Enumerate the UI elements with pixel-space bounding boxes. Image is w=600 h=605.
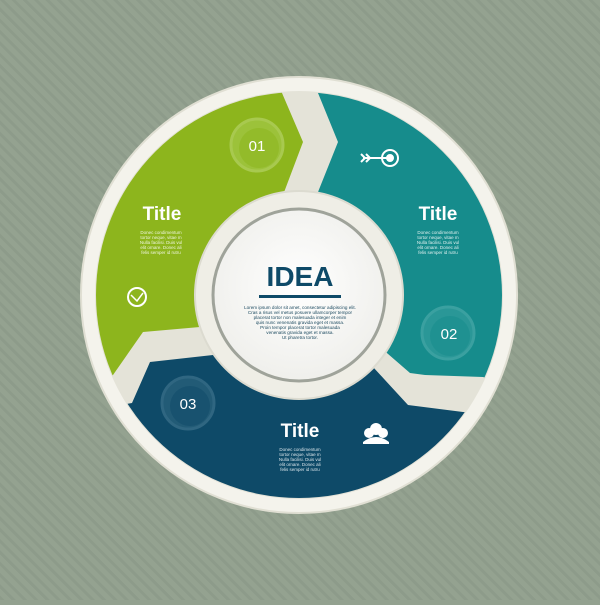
- center text: Ut pharetra tortor.: [282, 335, 318, 340]
- title 1: [140, 204, 182, 255]
- panel: teal segment 02: [318, 92, 502, 378]
- badge 02: 02: [441, 326, 457, 343]
- title 3: Donec condimentum: [279, 447, 321, 452]
- title 3: felis semper id rutru: [280, 467, 320, 472]
- panel: green segment 01: [96, 92, 303, 376]
- title 3: [279, 421, 321, 472]
- outer ring: [81, 77, 517, 513]
- title 3: elit ornare. Donec ali: [279, 462, 321, 467]
- title 1: elit ornare. Donec ali: [140, 245, 182, 250]
- badge 03: [162, 377, 214, 429]
- icon: clock: [128, 288, 146, 306]
- center text: Proin tempor placerat tortor malesuada: [260, 325, 340, 330]
- title 2: tortor neque, vitae m: [417, 235, 459, 240]
- icon: cloud hat: [363, 423, 389, 444]
- title 2: Donec condimentum: [417, 230, 459, 235]
- title 1: Title: [143, 204, 181, 225]
- center circle: [195, 191, 403, 399]
- panel: blue segment 03: [128, 355, 465, 498]
- title 2: felis semper id rutru: [418, 250, 458, 255]
- title 2: Nulla facilisi. Duis vul: [417, 240, 459, 245]
- title 2: Title: [419, 204, 457, 225]
- center text: Cras a risus vel metus posuere ullamcorper tempor: [248, 310, 353, 315]
- center text: quis nunc venenatis gravida eget et massa.: [256, 320, 344, 325]
- center text: Lorem ipsum dolor sit amet, consectetur adipiscing elit.: [244, 305, 356, 310]
- center text: venenatis gravida eget et massa.: [266, 330, 334, 335]
- title 1: Donec condimentum: [140, 230, 182, 235]
- title 2: elit ornare. Donec ali: [417, 245, 459, 250]
- heading: IDEA: IDEA: [267, 261, 333, 292]
- badge 01: [231, 119, 283, 171]
- badge 01: 01: [249, 138, 265, 155]
- badge 02: [422, 307, 474, 359]
- title 1: felis semper id rutru: [141, 250, 181, 255]
- title 1: Nulla facilisi. Duis vul: [140, 240, 182, 245]
- title 3: Nulla facilisi. Duis vul: [279, 457, 321, 462]
- badge 03: 03: [180, 396, 196, 413]
- title 3: Title: [281, 421, 319, 442]
- title 1: tortor neque, vitae m: [140, 235, 182, 240]
- title 2: [417, 204, 459, 255]
- center text: placerat tortor non malesuada integer et enim: [254, 315, 347, 320]
- icon: target arrow: [361, 150, 398, 166]
- title 3: tortor neque, vitae m: [279, 452, 321, 457]
